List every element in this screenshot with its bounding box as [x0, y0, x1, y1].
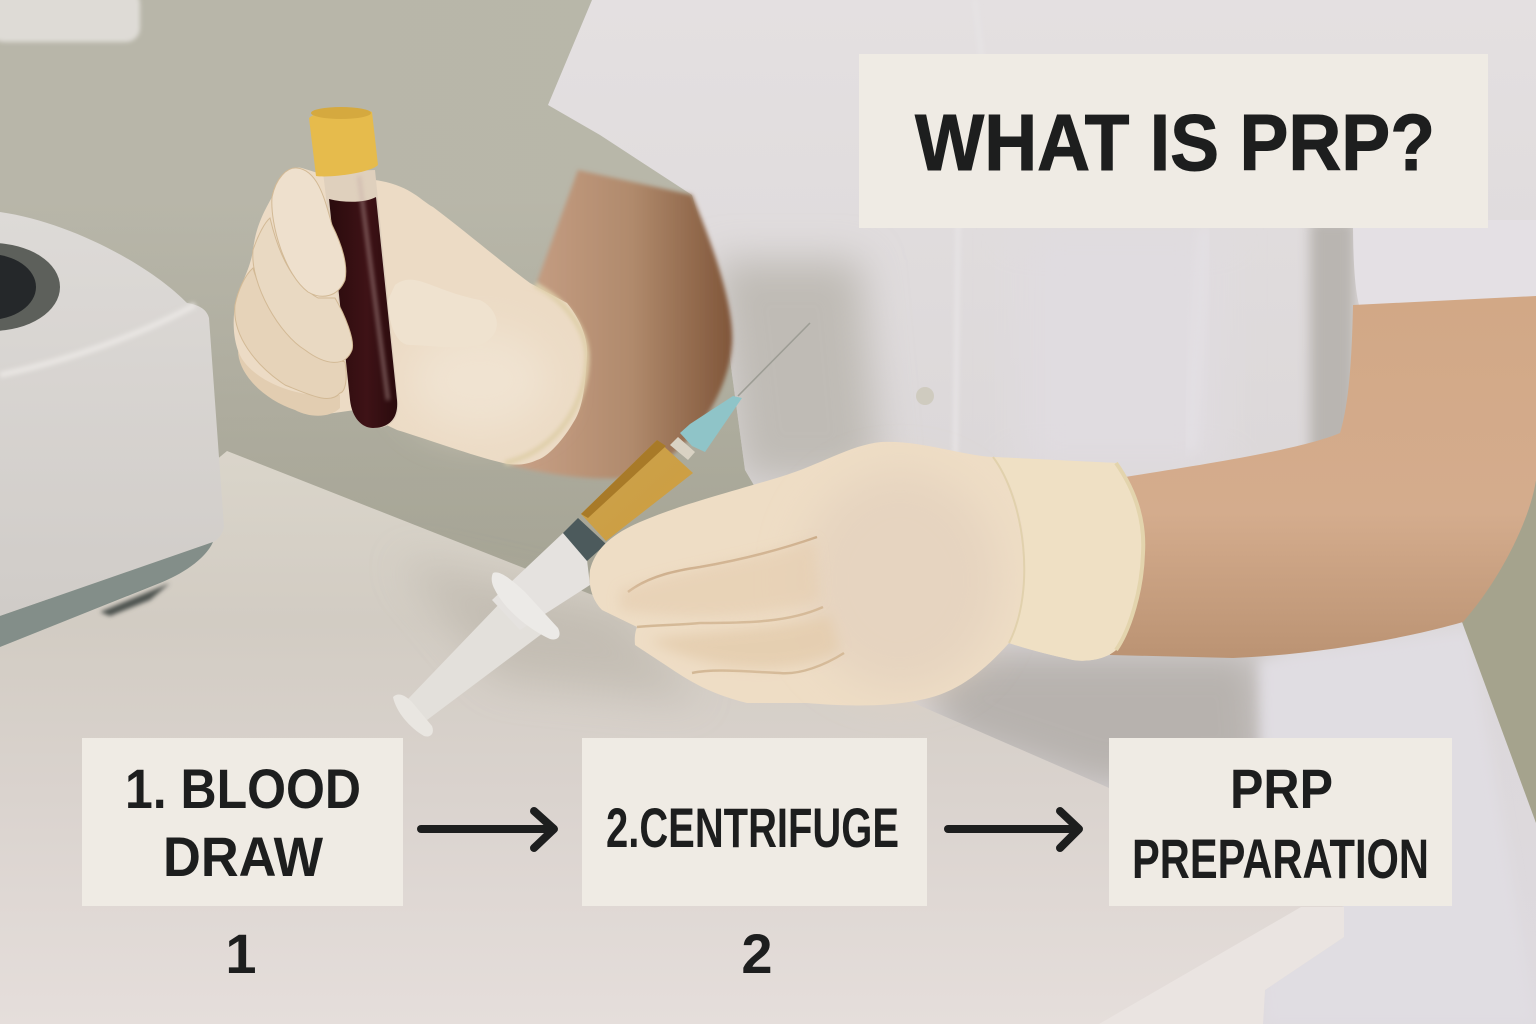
glove cuff	[505, 285, 587, 463]
middle finger	[253, 218, 353, 362]
thumb	[388, 280, 497, 347]
rubber stopper	[563, 518, 606, 561]
gloved right hand	[590, 442, 1143, 705]
left forearm	[510, 170, 732, 478]
finger shadow	[620, 540, 820, 617]
tube cap	[309, 109, 378, 176]
right sleeve	[1353, 220, 1536, 308]
right wall wedge	[1462, 480, 1536, 823]
arrow: step 2 to PRP preparation	[948, 811, 1079, 848]
plunger rod	[407, 600, 543, 720]
glove body and cuff	[590, 442, 1143, 705]
blood tube	[309, 107, 398, 428]
index finger	[272, 168, 346, 296]
gloved left hand	[234, 107, 587, 465]
finger creases	[628, 537, 817, 592]
ring finger	[235, 268, 346, 398]
step box: centrifuge: 2.CENTRIFUGE	[606, 796, 899, 859]
syringe	[393, 323, 810, 737]
step box: blood draw	[82, 738, 403, 906]
little finger	[238, 350, 340, 416]
barrel	[492, 533, 590, 630]
PRP fluid	[581, 440, 693, 541]
title panel	[859, 54, 1488, 228]
centrifuge	[0, 212, 224, 647]
needle	[738, 323, 810, 396]
right forearm	[1110, 296, 1536, 658]
arrow: step 1 to step 2	[421, 811, 554, 848]
teal hub	[680, 396, 742, 452]
title: WHAT IS PRP?	[915, 98, 1435, 187]
cuff inner line	[993, 457, 1024, 643]
end flange	[393, 695, 433, 737]
table surface	[0, 451, 1344, 1024]
centrifuge opening	[0, 243, 60, 331]
cuff edge	[1116, 463, 1143, 650]
step number 2: 2	[741, 922, 773, 985]
back of hand tone	[800, 470, 1000, 690]
palm highlight	[410, 330, 550, 430]
step box: PRP preparation: PRP	[1230, 757, 1333, 820]
step box: PRP preparation: PREPARATION	[1132, 827, 1429, 890]
syringe tip	[670, 437, 695, 460]
step box: PRP preparation	[1109, 738, 1452, 906]
cuff band	[993, 457, 1143, 661]
step box: centrifuge	[582, 738, 927, 906]
step number 1: 1	[225, 922, 257, 985]
barrel flange	[492, 572, 560, 639]
step box: blood draw: 1. BLOOD	[125, 757, 361, 820]
step box: blood draw: DRAW	[163, 825, 323, 888]
uniform	[548, 0, 1536, 1024]
